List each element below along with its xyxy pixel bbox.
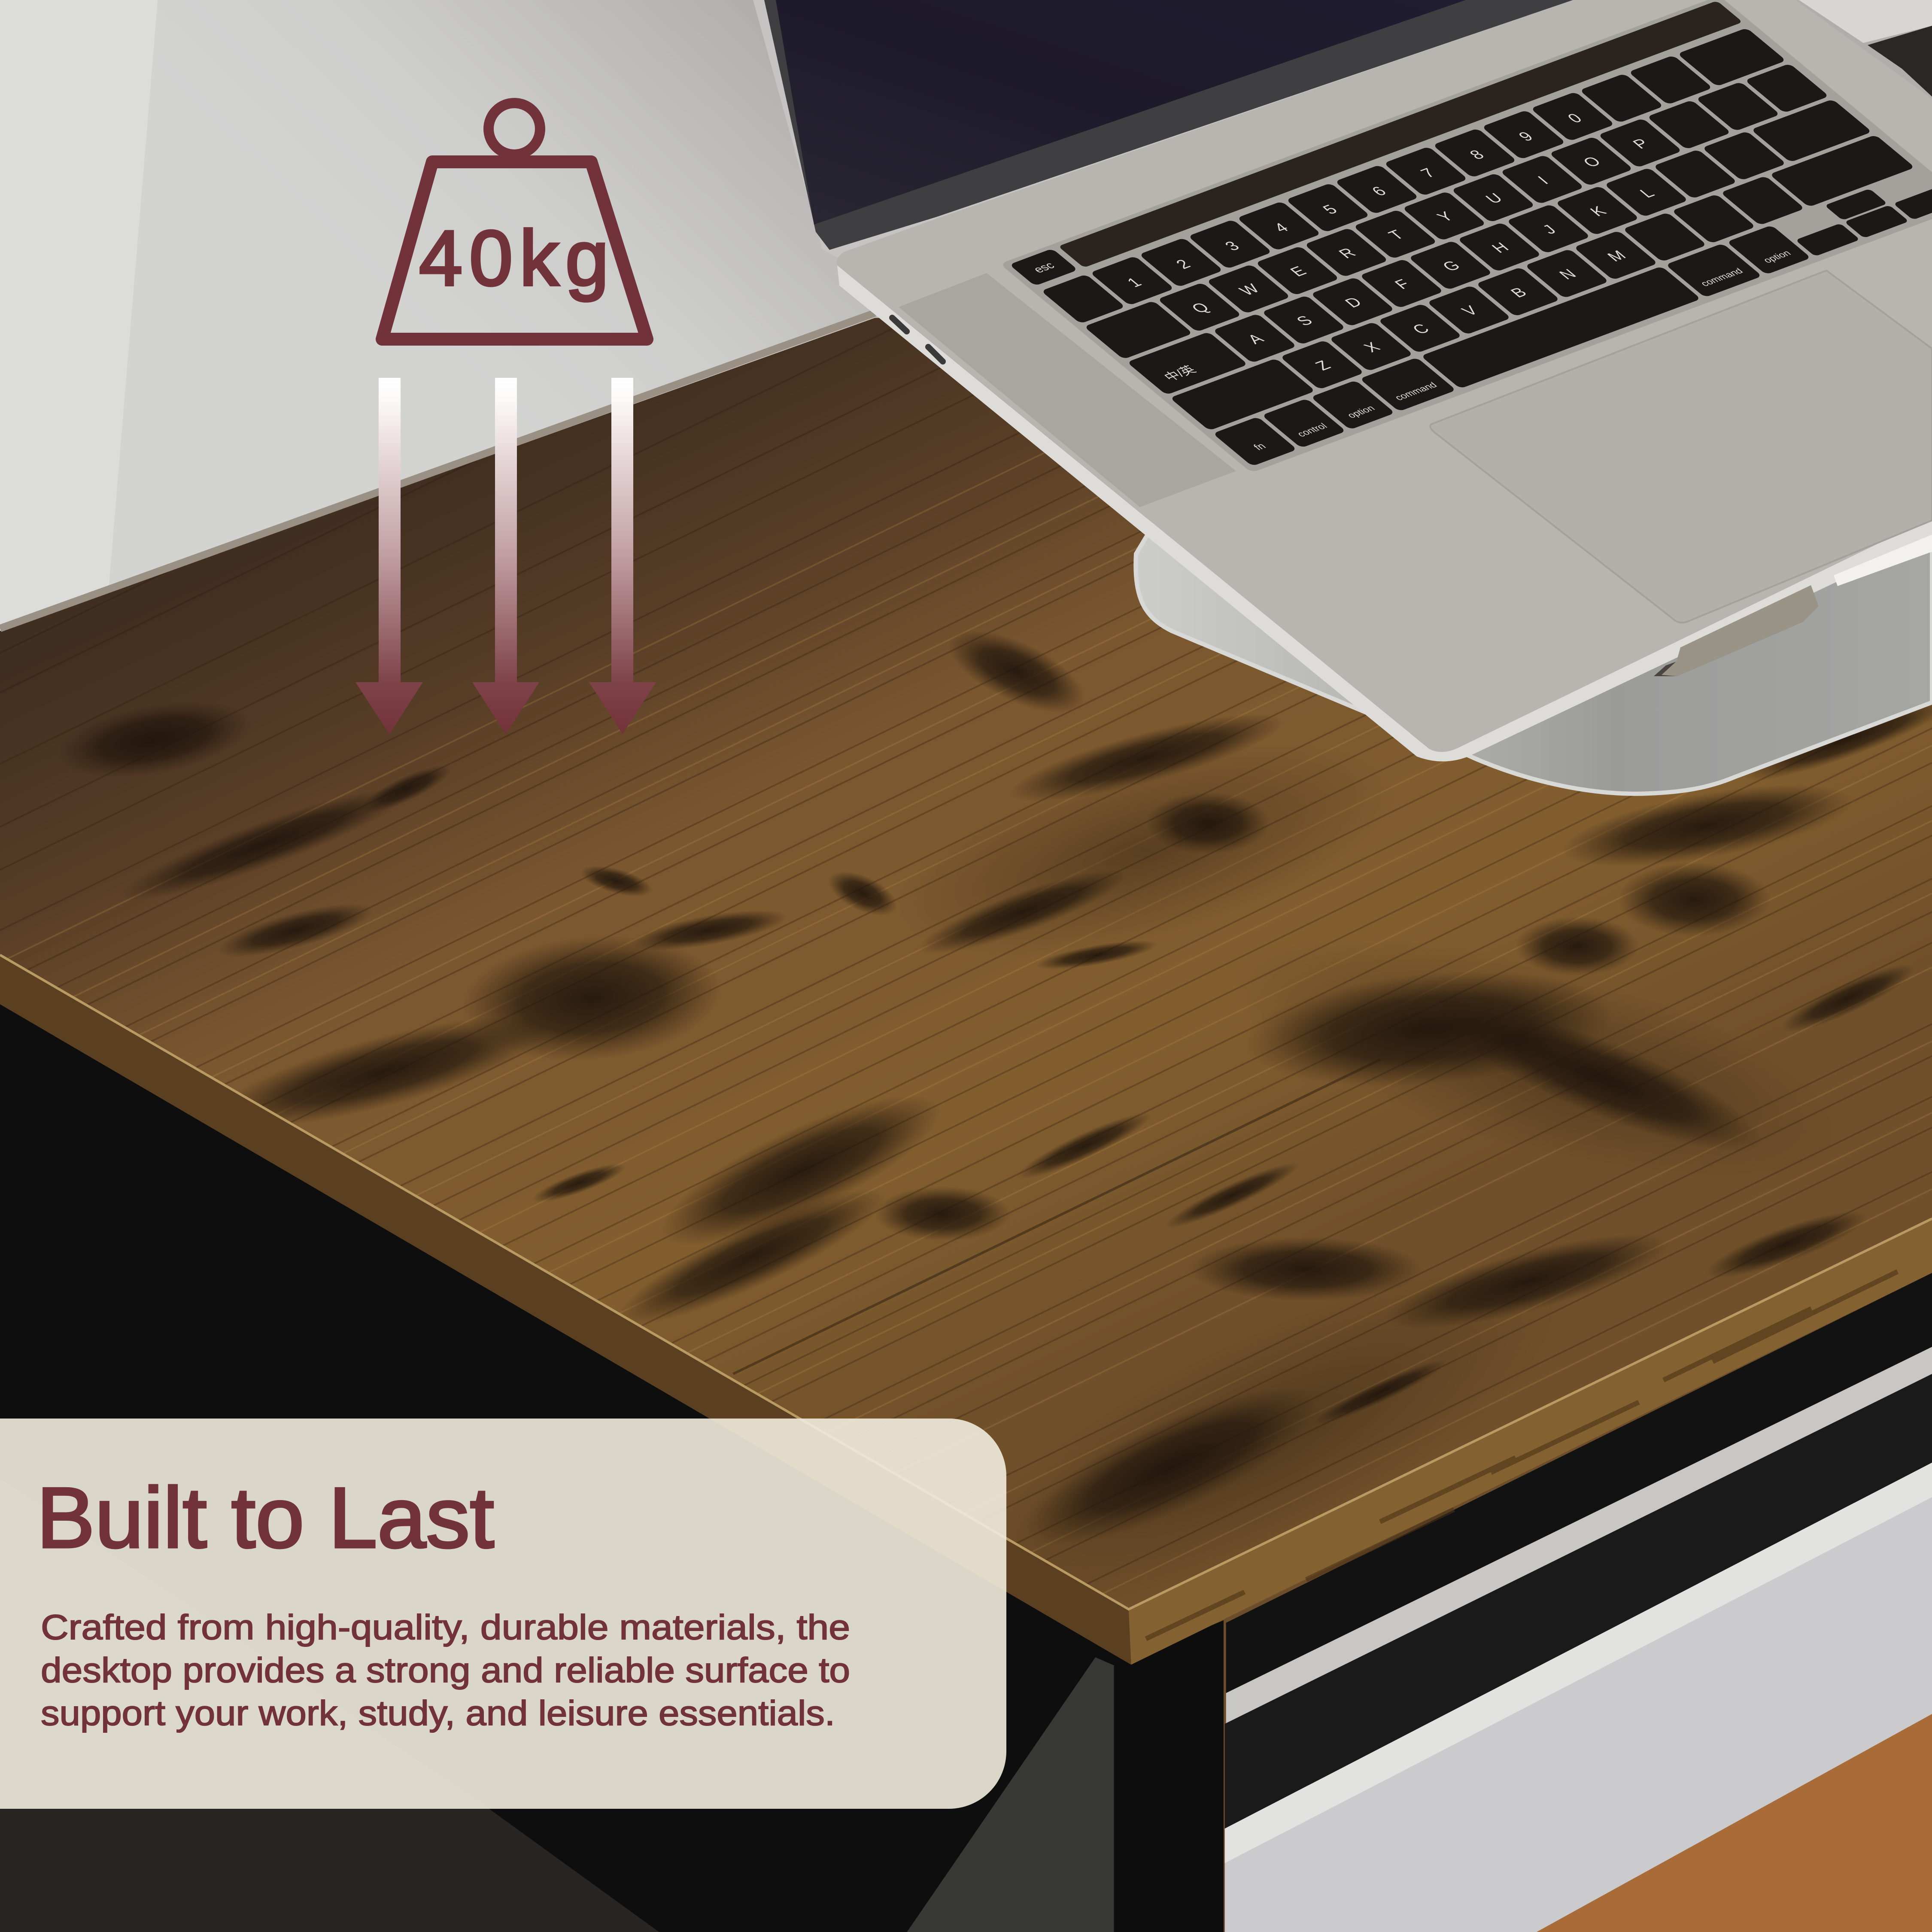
keyboard labels: command (1392, 380, 1440, 402)
keyboard labels: option (1344, 404, 1377, 420)
laptop body (837, 0, 1932, 752)
keyboard labels: K (1586, 204, 1610, 219)
usb ports (892, 318, 943, 361)
keyboard labels: T (1385, 228, 1408, 243)
keyboard labels: 5 (1319, 202, 1342, 217)
large soft stains (874, 700, 1874, 1687)
keyboard (1000, 0, 1932, 473)
keyboard labels: Q (1188, 300, 1213, 316)
keyboard labels: O (1579, 154, 1605, 170)
body text: Crafted from high-quality, durable materials, the (41, 1608, 850, 1647)
keyboard labels: command (1698, 266, 1745, 288)
keyboard labels: 2 (1172, 257, 1195, 272)
dark knots and burns (51, 614, 1932, 1574)
keyboard labels: I (1534, 173, 1552, 187)
keyboard labels: P (1629, 136, 1653, 152)
white stripe (1834, 535, 1932, 586)
laptop (753, 0, 1932, 761)
keyboard labels: F (1391, 277, 1414, 292)
black metal frame and drawer below desk (1114, 1273, 1932, 1932)
keyboard labels: N (1555, 267, 1580, 283)
keyboard labels: esc (1030, 260, 1057, 275)
keyboard labels: B (1507, 285, 1531, 301)
keyboard labels: Z (1312, 358, 1335, 373)
keyboard labels: V (1458, 303, 1482, 319)
arrow 2 (472, 378, 539, 734)
laptop stand base (1136, 515, 1932, 794)
keyboard labels: option (1760, 248, 1793, 264)
arrow 3 (589, 378, 656, 734)
plank seam (733, 1060, 1380, 1374)
body text: desktop provides a strong and reliable surface to (41, 1651, 850, 1690)
arrow 1 (355, 378, 423, 734)
heading: Built to Last (36, 1470, 494, 1566)
keyboard labels: U (1482, 191, 1507, 207)
keyboard labels: 中/英 (1161, 364, 1199, 383)
laptop screen (753, 0, 1589, 258)
keyboard labels: A (1244, 331, 1268, 347)
keyboard labels: D (1341, 295, 1366, 310)
trackpad (1430, 270, 1932, 623)
keyboard labels: R (1335, 246, 1360, 261)
weight body (382, 162, 647, 339)
speaker grille (899, 273, 1236, 507)
keyboard labels: C (1409, 321, 1434, 337)
desktop front edges (0, 955, 1932, 1665)
keyboard labels: fn (1251, 441, 1269, 452)
keyboard labels: S (1293, 313, 1317, 329)
keyboard labels: X (1360, 340, 1384, 355)
weight value: 40kg (419, 214, 609, 302)
keyboard labels: 9 (1515, 129, 1537, 144)
keyboard labels: M (1604, 248, 1630, 264)
keyboard labels: 3 (1221, 239, 1244, 254)
weight ring (489, 103, 540, 155)
wall skirting line (0, 313, 875, 629)
panel background (0, 1419, 1006, 1809)
keyboard labels (1030, 67, 1793, 455)
body text: support your work, study, and leisure essentials. (41, 1694, 835, 1733)
text panel (0, 1419, 1006, 1809)
body text (41, 1608, 850, 1733)
keyboard labels: Y (1433, 209, 1458, 225)
keyboard labels: W (1236, 281, 1264, 298)
keyboard labels: L (1636, 186, 1659, 200)
keyboard labels: 0 (1564, 111, 1586, 126)
keyboard labels: control (1294, 421, 1330, 438)
fabric drawer (0, 1004, 1131, 1932)
keyboard labels: 4 (1270, 220, 1293, 235)
weight icon: 40kg (382, 103, 647, 339)
keyboard labels: 1 (1123, 275, 1146, 290)
keyboard labels: G (1439, 258, 1464, 274)
keyboard labels: E (1286, 264, 1311, 279)
downward load arrows (355, 378, 656, 734)
object behind laptop (1799, 0, 1932, 97)
keyboard labels: 7 (1417, 166, 1440, 181)
keyboard labels: H (1488, 240, 1513, 256)
wall (0, 0, 1932, 631)
keyboard labels: 6 (1368, 184, 1391, 199)
stand clip (1654, 585, 1819, 676)
keyboard labels: J (1539, 222, 1560, 237)
laptop body edge (837, 265, 1932, 762)
keyboard labels: 8 (1466, 147, 1488, 162)
